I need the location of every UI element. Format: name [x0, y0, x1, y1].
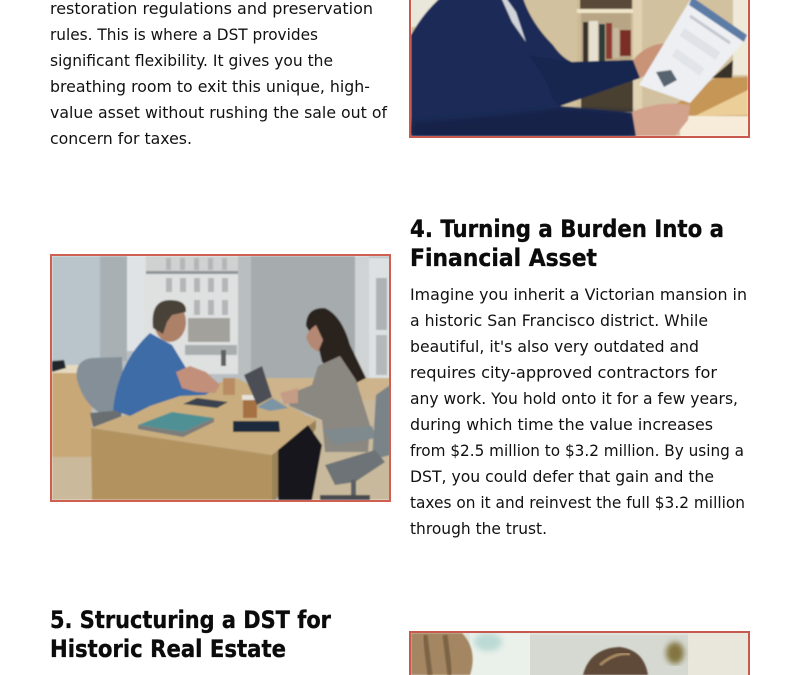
text block: section 4 paragraph: taxes on it and reinvest the full $3.2 million [410, 493, 745, 512]
text block: section 3 closing paragraph: concern for taxes. [50, 129, 192, 148]
heading: section 4 [410, 215, 724, 272]
text block: section 4 paragraph: Imagine you inherit a Victorian mansion in [410, 285, 747, 304]
man's chair [77, 357, 124, 414]
text block: section 4 paragraph: beautiful, it's also very outdated and [410, 337, 699, 356]
desk [91, 378, 316, 455]
text block: section 4 paragraph: through the trust. [410, 519, 547, 538]
heading: section 4: Financial Asset [410, 244, 597, 272]
text block: section 3 closing paragraph: rules. This is where a DST provides [50, 25, 318, 44]
photo: man in navy sweater reading a report [410, 0, 749, 137]
text block: section 4 paragraph: DST, you could defer that gain and the [410, 467, 714, 486]
report [639, 0, 747, 103]
laptop [244, 366, 272, 405]
items on desk [138, 412, 214, 432]
man [113, 333, 218, 416]
text block: section 4 paragraph: requires city-approved contractors for [410, 363, 717, 382]
photo: office meeting at a desk [51, 255, 390, 501]
side cabinet [52, 372, 92, 457]
hands [632, 43, 664, 78]
sweater [411, 0, 640, 136]
heading: section 5 [50, 606, 331, 663]
photo: woman seen from above, cropped at page edge [410, 632, 749, 675]
heading: section 5: Historic Real Estate [50, 635, 286, 663]
heading: section 4: 4. Turning a Burden Into a [410, 215, 724, 243]
woman [306, 308, 366, 385]
text block: section 4 paragraph: from $2.5 million to $3.2 million. By using a [410, 441, 744, 460]
woman's chair [323, 426, 376, 445]
text block: section 4 paragraph: a historic San Francisco district. While [410, 311, 708, 330]
text block: section 3 closing paragraph [50, 0, 387, 148]
text block: section 3 closing paragraph: significant flexibility. It gives you the [50, 51, 333, 70]
text block: section 4 paragraph [410, 285, 747, 538]
text block: section 4 paragraph: during which time the value increases [410, 415, 713, 434]
text block: section 3 closing paragraph: breathing room to exit this unique, high- [50, 77, 370, 96]
text block: section 3 closing paragraph: value asset without rushing the sale out of [50, 103, 387, 122]
text block: section 4 paragraph: any work. You hold onto it for a few years, [410, 389, 738, 408]
heading: section 5: 5. Structuring a DST for [50, 606, 331, 634]
